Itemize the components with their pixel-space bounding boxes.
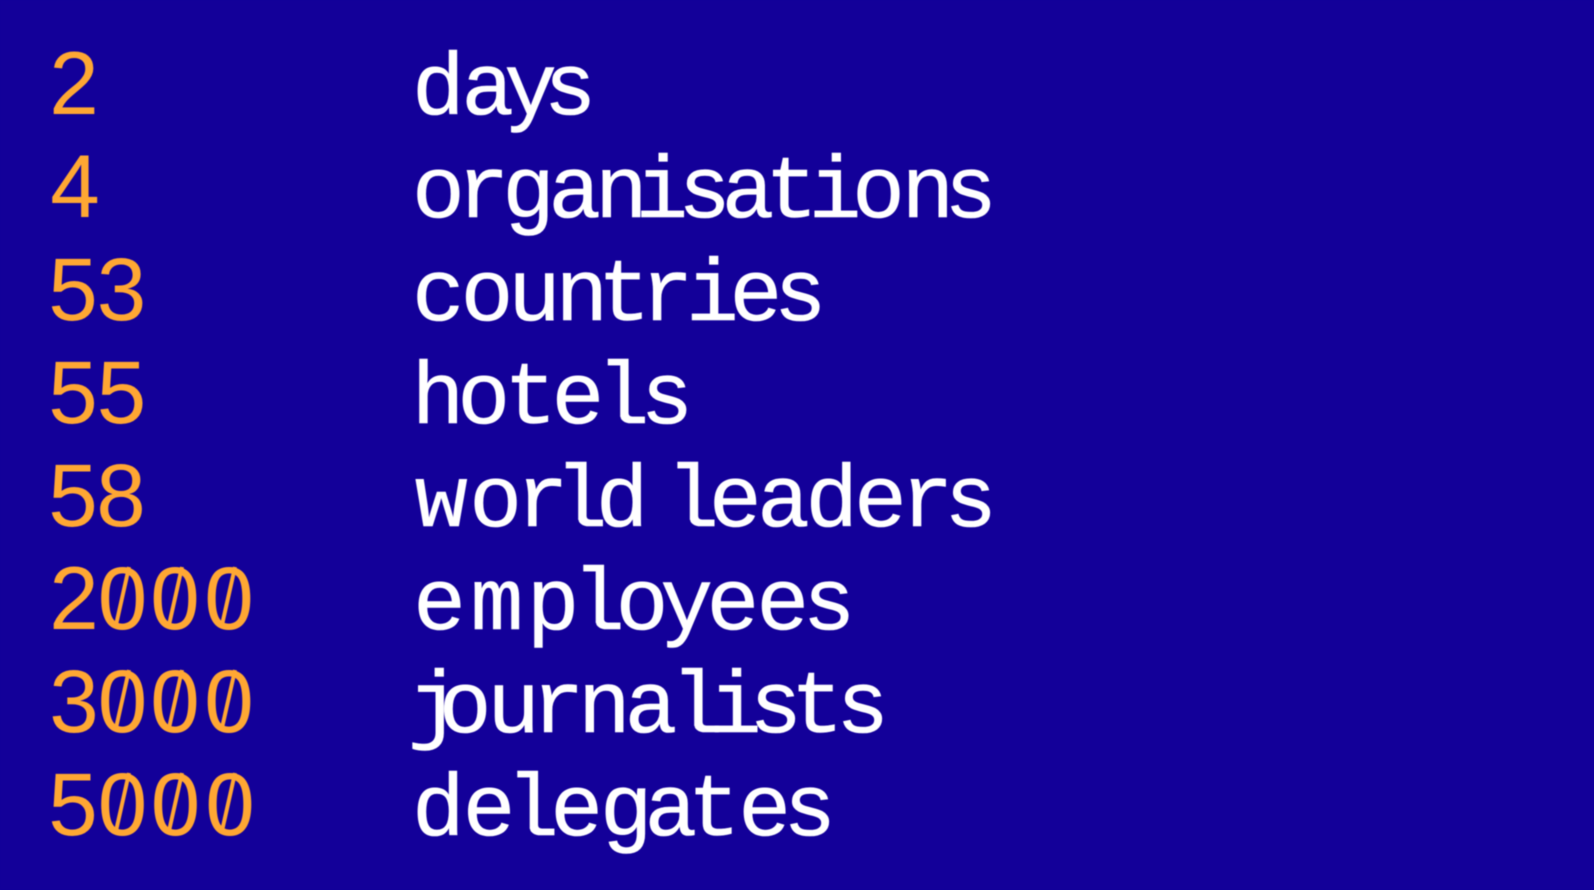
number: 2: 2 — [49, 33, 99, 133]
number: 3000 with slashed zeros: 3000 — [49, 651, 254, 751]
number: 58: 58 — [48, 445, 146, 545]
row: 2000 employees — [49, 548, 855, 656]
label: employees: employees — [413, 557, 855, 656]
label: countries: countries — [412, 248, 827, 347]
row: 55 hotels — [48, 342, 693, 450]
label: world leaders: world leaders — [415, 454, 997, 553]
number: 53: 53 — [48, 239, 146, 339]
label: journalists: journalists — [408, 660, 889, 759]
label: days: days — [412, 42, 596, 141]
number: 2000 with slashed zeros: 2000 — [49, 548, 254, 648]
label: hotels: hotels — [412, 351, 693, 450]
row: 4 organisations — [50, 136, 997, 244]
row: 5000 delegates — [48, 754, 836, 862]
row: 3000 journalists — [49, 651, 889, 759]
row: 58 world leaders — [48, 445, 997, 553]
number: 55: 55 — [48, 342, 146, 442]
number: 5000 with slashed zeros: 5000 — [48, 754, 255, 854]
label: delegates: delegates — [412, 763, 836, 862]
row: 2 days — [49, 33, 596, 141]
label: organisations: organisations — [412, 145, 997, 244]
row: 53 countries — [48, 239, 827, 347]
number: 4: 4 — [50, 136, 100, 236]
